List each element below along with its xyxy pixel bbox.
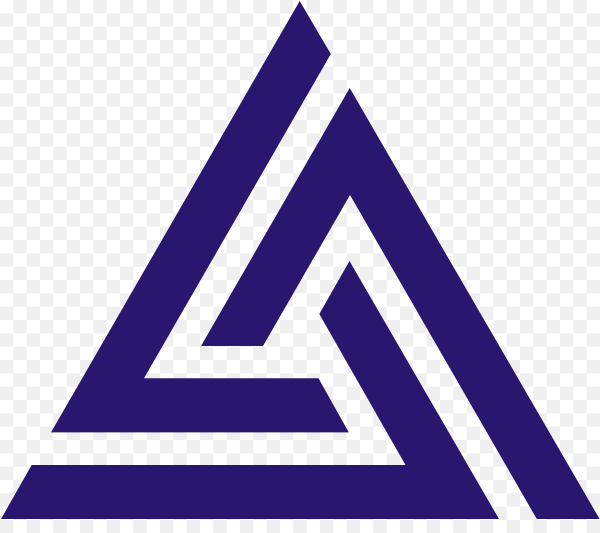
outer left stripe	[51, 1, 349, 432]
middle right stripe	[201, 88, 600, 519]
inner bottom stripe	[1, 261, 499, 519]
